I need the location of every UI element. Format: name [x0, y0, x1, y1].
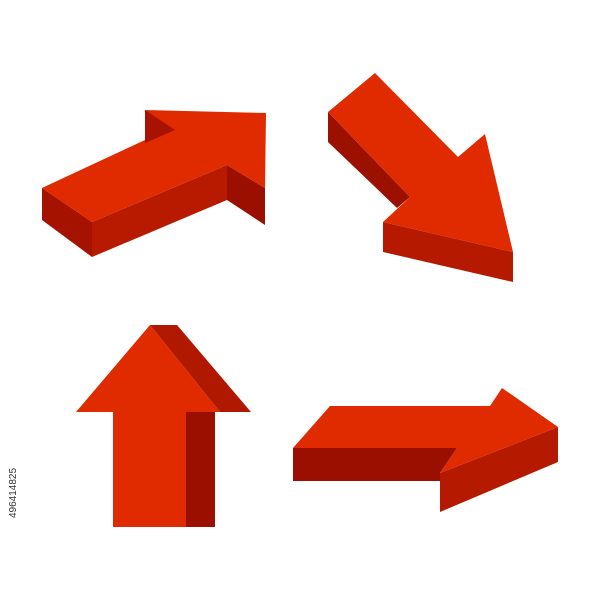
arrow: up-right — [42, 110, 266, 257]
arrow: right — [293, 388, 558, 512]
arrow: down-right — [328, 73, 513, 282]
arrow: up — [76, 325, 251, 527]
stock id text: 496414825 — [8, 468, 19, 518]
